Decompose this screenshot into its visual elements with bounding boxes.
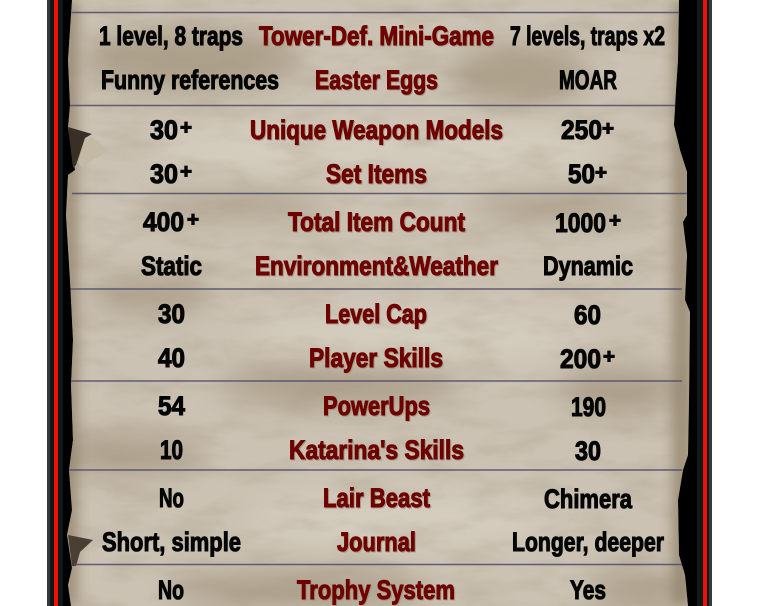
label: Player Skills: Player Skills xyxy=(309,343,443,373)
row: total item count: + xyxy=(187,209,199,231)
row: total item count: + xyxy=(609,210,621,232)
row: lair beast: Chimera xyxy=(544,484,633,514)
row: level cap xyxy=(158,299,601,330)
row: player skills: 200 xyxy=(560,344,601,374)
row: journal xyxy=(102,527,664,557)
row: unique weapon models: + xyxy=(602,118,614,140)
row: katarina's skills xyxy=(160,435,601,466)
row: trophy system: Yes xyxy=(570,575,606,605)
row: lair beast xyxy=(159,483,633,514)
label: Tower-Def. Mini-Game: Tower-Def. Mini-Game xyxy=(259,21,494,51)
row: level cap: 30 xyxy=(158,299,185,329)
section divider lines xyxy=(66,12,687,564)
row: katarina's skills: 30 xyxy=(575,436,601,466)
icon: left torn paper fold xyxy=(68,127,109,168)
row: set items: + xyxy=(595,162,607,184)
row: set items: 50 xyxy=(568,159,595,189)
row: set items xyxy=(150,159,607,189)
icon: lower left torn paper fold xyxy=(68,535,93,566)
label: Trophy System: Trophy System xyxy=(297,575,455,605)
row: tower defense mini-game: 7 levels, traps x2 xyxy=(510,21,665,51)
label: Environment&Weather: Environment&Weather xyxy=(255,251,498,281)
label: Katarina's Skills: Katarina's Skills xyxy=(289,435,464,465)
row: total item count xyxy=(143,207,621,238)
row: tower defense mini-game xyxy=(99,21,665,51)
row: easter eggs: MOAR xyxy=(559,65,617,95)
label: Journal: Journal xyxy=(337,527,416,557)
label: Easter Eggs: Easter Eggs xyxy=(315,65,438,95)
table rows xyxy=(99,21,665,605)
label: Total Item Count: Total Item Count xyxy=(288,207,465,237)
row: level cap: 60 xyxy=(574,300,601,330)
row: unique weapon models xyxy=(150,115,614,145)
row: journal: Short, simple xyxy=(102,527,241,557)
row: set items: 30 xyxy=(150,159,178,189)
row: katarina's skills: 10 xyxy=(160,435,183,465)
label: Level Cap: Level Cap xyxy=(325,299,427,329)
row: tower defense mini-game: 1 level, 8 traps xyxy=(99,21,243,51)
row: environment and weather: Dynamic xyxy=(543,251,633,281)
row: environment and weather xyxy=(141,251,633,281)
row: player skills: 40 xyxy=(158,343,185,373)
row: lair beast: No xyxy=(159,483,184,513)
row: trophy system: No xyxy=(158,575,184,605)
row: unique weapon models: + xyxy=(180,117,192,139)
row: environment and weather: Static xyxy=(141,251,202,281)
row: easter eggs xyxy=(101,65,617,95)
label: Lair Beast: Lair Beast xyxy=(323,483,430,513)
row: player skills: + xyxy=(603,346,615,368)
row: powerups: 54 xyxy=(158,391,185,421)
row: trophy system xyxy=(158,575,606,605)
row: journal: Longer, deeper xyxy=(512,527,664,557)
label: Unique Weapon Models: Unique Weapon Models xyxy=(250,115,503,145)
row: unique weapon models: 250 xyxy=(561,115,602,145)
row: unique weapon models: 30 xyxy=(150,115,178,145)
row: total item count: 400 xyxy=(143,207,184,237)
row: set items: + xyxy=(180,161,192,183)
row: easter eggs: Funny references xyxy=(101,65,279,95)
row: powerups: 190 xyxy=(571,392,606,422)
row: powerups xyxy=(158,391,606,422)
row: total item count: 1000 xyxy=(555,208,606,238)
label: Set Items: Set Items xyxy=(326,159,427,189)
row: player skills xyxy=(158,343,615,374)
label: PowerUps: PowerUps xyxy=(323,391,430,421)
